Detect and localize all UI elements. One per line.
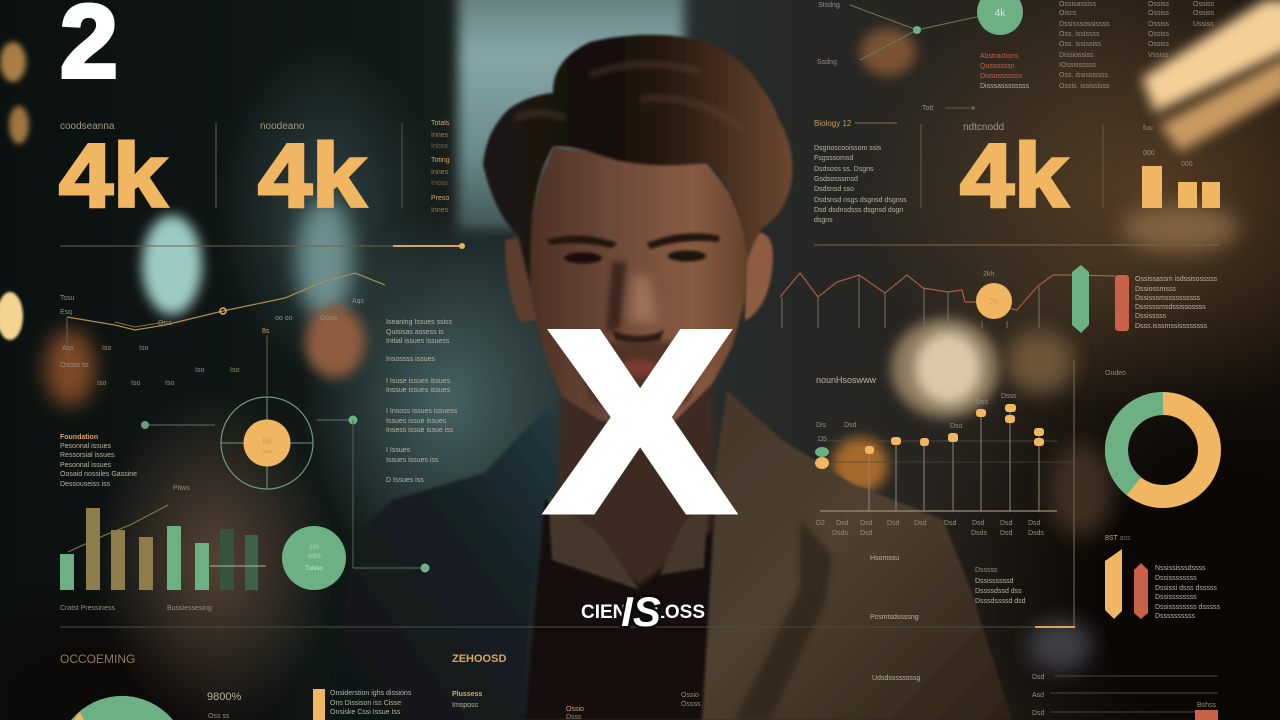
notes: Dsgnoscooissom ssis (814, 145, 882, 152)
chart labels: Ososs ss (60, 362, 89, 369)
mini bar chart: right (1142, 125, 1220, 208)
green circle callout: 280 (309, 545, 320, 551)
chart labels: Aqs (352, 298, 365, 305)
divider: right (814, 244, 1219, 246)
text block: foundation: Ressorsial issues (60, 452, 115, 459)
axis labels: Dsd (1000, 530, 1013, 537)
axis labels: D5 (818, 436, 827, 443)
text block: top right red list: Dissosssssss (980, 73, 1023, 80)
text block: centre-left notes: Issues issue issues (386, 418, 447, 425)
brand logo: LOSS (653, 602, 705, 623)
green circle callout: Tuisso (305, 566, 323, 572)
text block: centre-left notes: I Insoss issues issuess (386, 408, 458, 415)
notes: Gsdsosssmsd (814, 176, 858, 183)
hair highlights (515, 64, 745, 130)
lollipop chart (815, 375, 1074, 537)
line chart: right red trend (780, 271, 1115, 328)
notes: Dsd dsdnsdsss dsgnsd dsgn (814, 207, 903, 214)
nose (606, 262, 626, 332)
shirt (525, 500, 715, 720)
axis labels: Dsds (832, 530, 848, 537)
text block: foundation (60, 434, 137, 488)
notes: Dssissssssss (1155, 594, 1197, 601)
mouth (618, 360, 662, 376)
axis labels: D2 (816, 520, 825, 527)
text block: foundation: Pesonnal issues (60, 462, 111, 469)
text columns: top right: Ossiss (1193, 1, 1214, 8)
stat label: coodseanna (60, 121, 115, 132)
face (530, 147, 747, 426)
axis labels: Dsd (860, 520, 873, 527)
divider with end dot (60, 243, 465, 249)
brand logo (581, 588, 705, 635)
axis labels: Dsd (914, 520, 927, 527)
jacket labels: Pcsmtsdssssng (870, 614, 919, 621)
hair (483, 35, 792, 285)
eyes (564, 252, 602, 264)
connector lines with dots (141, 416, 430, 572)
big number: 4k (59, 125, 168, 226)
text columns: top right: IOssissssss (1059, 62, 1096, 69)
text block: right capsule notes: Dssisssmssssssssss (1135, 295, 1200, 302)
indicator group: lower right (1105, 535, 1220, 620)
notes: Dssssssssss (1155, 613, 1196, 620)
side labels (431, 120, 450, 214)
text columns: top right: Ossiss (1148, 41, 1170, 48)
axis labels: Dsd (1000, 520, 1013, 527)
text block: top right red list: Abstractions (980, 53, 1019, 60)
notes: Dssissi dsss dsssss (1155, 585, 1217, 592)
notes: Dsdsnsd nsgs dsgnsd dsgnss (814, 197, 907, 204)
chart labels: Ass (62, 345, 74, 352)
text block: foundation: Pesonnal issues (60, 443, 111, 450)
bar chart axis labels: Cratst Pressiness (60, 605, 115, 612)
text columns: top right: Ossisassiss (1059, 1, 1096, 8)
bar chart axis labels: Bussiessesing (167, 605, 212, 612)
indicator: green capsule (1072, 265, 1089, 333)
notes: Dssissssssss (1155, 575, 1197, 582)
axis labels: Dsd (836, 520, 849, 527)
heading and notes: lower-centre: Ossss (681, 701, 701, 708)
line chart: right red trend: 2kh (983, 271, 994, 278)
side labels: Inoss (431, 143, 448, 150)
photo: man in jacket (327, 35, 1012, 720)
panel: right stat (814, 105, 1103, 226)
chart labels: oo oo (275, 315, 293, 322)
chart labels: Iso (131, 380, 140, 387)
axis labels: Dsd (972, 520, 985, 527)
text columns: top right: Ussiss (1193, 21, 1214, 28)
text block: centre-left notes: Insossss issues (386, 356, 436, 363)
heading and notes: lower-centre: Plussess (452, 691, 482, 698)
mini bar chart: right: fuu (1143, 125, 1153, 132)
yellow bar with notes: Onsiderstion ighs dissions (330, 690, 412, 697)
text columns: top right: Oss. issississss (1059, 72, 1108, 79)
red capsule (1134, 563, 1148, 619)
neck (555, 383, 713, 585)
network diagram: top right: Stsdng (818, 2, 840, 9)
notes: Dsdsnsd sso (814, 186, 854, 193)
big number: 4k (258, 125, 367, 226)
text block: right capsule notes: Dssisssss (1135, 313, 1167, 320)
figures: lower-left: 9800% (207, 691, 241, 703)
panel: top-left stat one (59, 121, 168, 226)
text columns: top right: Ossiss (1193, 10, 1214, 17)
mini bar chart: right: 000 (1181, 161, 1193, 168)
jacket labels (870, 555, 920, 682)
indicator: red capsule (1115, 275, 1129, 331)
side labels: Toting (431, 157, 450, 164)
notes: Dsdsoss ss. Dsgns (814, 166, 874, 173)
text block: lower lollipop notes (975, 567, 1026, 605)
heading and notes: lower-centre (452, 653, 701, 720)
chart labels: Iso (230, 367, 239, 374)
network diagram: top right: 4k (995, 8, 1006, 19)
shirt collar (548, 495, 708, 590)
notes (814, 145, 907, 224)
text block: centre-left notes: Insess issue issue iss (386, 427, 454, 434)
text block: centre-left notes: I Issues (386, 447, 411, 454)
text columns: top right: Ossiss (1148, 10, 1170, 17)
axis labels: Dsd (860, 530, 873, 537)
text block: foundation: Dessouseiss iss (60, 481, 111, 488)
text block: top right red list: Disssassssssss (980, 83, 1030, 90)
lower-right table (1032, 674, 1218, 720)
chart labels: Iso (165, 380, 174, 387)
donut chart: Oudeo (1105, 370, 1126, 377)
text block: lower lollipop notes: Dsssdssssd dsd (975, 598, 1026, 605)
text block: centre-left notes: Issues issues iss (386, 457, 439, 464)
text block: centre-left notes: Initial issues issuess (386, 338, 450, 345)
figures: lower-left: Oss ss (208, 713, 230, 720)
gauge: ring with yellow centre: Isso (262, 449, 272, 455)
notes: Dssissssssss dsssss (1155, 604, 1220, 611)
frame line: right panel (1035, 360, 1075, 627)
text columns: top right: Ossiss (1148, 31, 1170, 38)
line chart: left trend (60, 273, 385, 395)
jacket labels: Udsdssssssssg (872, 675, 920, 682)
axis labels: Dsd (1028, 520, 1041, 527)
axis labels: Dsds (1028, 530, 1044, 537)
axis labels: Dsd (944, 520, 957, 527)
text block: right capsule notes: Dssisssmsdssissossss (1135, 304, 1206, 311)
heading and notes: lower-centre: Ossio (566, 706, 584, 713)
axis labels: Dis (816, 422, 827, 429)
text block: foundation: Oosaid nossiles Gassine (60, 471, 137, 478)
bar chart axis labels (60, 605, 212, 612)
notes (1155, 565, 1220, 620)
text columns: top right: Oiscs (1059, 10, 1077, 17)
mini bar chart: right: 000 (1143, 150, 1155, 157)
chart labels: Iso (97, 380, 106, 387)
heading and notes: lower-centre: ZEHOOSD (452, 653, 506, 665)
jacket lapel shadow (735, 520, 832, 720)
text block: centre-left notes: Quisisas assess is (386, 329, 444, 336)
chart labels: Iso (139, 345, 148, 352)
text block: top right red list: Qussosssn (980, 63, 1015, 70)
text block: centre-left notes: Iseaning Issues ssiss (386, 319, 453, 326)
lower-right table: Dsd (1032, 674, 1045, 681)
lower-right table: Bshss (1197, 702, 1217, 709)
side labels: Inoss (431, 180, 448, 187)
donut chart (1105, 370, 1210, 496)
notes: dsgns (814, 217, 833, 224)
indicator group: lower right: 8ST ass (1105, 535, 1131, 542)
panel: right stat: ndtcnodd (963, 122, 1004, 133)
notes: Fsgsssomsd (814, 155, 853, 162)
text block: centre-left notes: I Isuse issues issues (386, 378, 451, 385)
stubble (575, 340, 705, 415)
green circle callout (282, 526, 346, 590)
side labels: Preso (431, 195, 449, 202)
text block: lower lollipop notes: Dssissssssd (975, 578, 1014, 585)
big number: 4k (960, 125, 1069, 226)
big X mark: X (547, 277, 734, 565)
text columns: top right: Oss. issississ (1059, 41, 1102, 48)
axis labels: Dss (976, 399, 989, 406)
jacket labels: Hsomssu (870, 555, 899, 562)
network diagram: top right: Ssdng (817, 59, 837, 66)
notes: Nssississsdssss (1155, 565, 1206, 572)
text block: centre-left notes: D Issues iss (386, 477, 424, 484)
gauge: ring with yellow centre (221, 397, 313, 489)
chart labels (60, 295, 365, 387)
text block: right capsule notes: Ossissassm isdssisosssss (1135, 276, 1218, 283)
text columns: top right (1059, 1, 1214, 90)
yellow marker (976, 283, 1012, 319)
green circle callout: 4889 (307, 554, 321, 560)
axis labels: Dso (950, 423, 963, 430)
text columns: top right: Oss. ississss (1059, 31, 1100, 38)
yellow capsule (1105, 549, 1122, 619)
bar chart: green and tan (60, 485, 266, 612)
axis labels: Dsd (887, 520, 900, 527)
axis labels: Dsds (971, 530, 987, 537)
yellow bar with notes (313, 689, 412, 720)
axis labels (816, 393, 1044, 537)
jacket left (327, 407, 562, 720)
text block: foundation: Foundation (60, 434, 98, 441)
text columns: top right: Ossiss (1148, 21, 1170, 28)
side labels: Innes (431, 132, 449, 139)
bar chart: green and tan: Pitws (173, 485, 190, 492)
chart labels: Esq (60, 309, 72, 316)
side labels: Innes (431, 169, 449, 176)
lower-right table: Dsd (1032, 710, 1045, 717)
chart labels: Iso (195, 367, 204, 374)
lollipop chart: nounHsoswww (816, 375, 877, 385)
jacket right (695, 390, 1012, 720)
chart labels: 8s (262, 328, 270, 335)
text columns: top right: Vssiss (1148, 52, 1169, 59)
text columns: top right: Dissiossiss (1059, 52, 1094, 59)
chart labels: Tssu (60, 295, 74, 302)
text columns: top right: Ossiss (1148, 1, 1170, 8)
chart labels: Qiss (158, 320, 172, 327)
network diagram: top right (817, 0, 1023, 66)
side labels: Innes (431, 207, 449, 214)
stat label: noodeano (260, 121, 305, 132)
text columns: top right: Dssisssossissss (1059, 21, 1110, 28)
text block: right capsule notes (1135, 276, 1218, 330)
text block: centre-left notes: Inssue issues issues (386, 387, 451, 394)
text block: lower lollipop notes: Dsssss (975, 567, 998, 574)
line chart: right red trend: 2k (990, 297, 999, 306)
text block: right capsule notes: Dsss.isssmssissssssss (1135, 323, 1207, 330)
heading and notes: lower-centre: Ossio (681, 692, 699, 699)
biology heading: Biology 12 (814, 119, 852, 128)
panel: right stat: Tott (922, 105, 933, 112)
heading: lower-left: OCCOEMING (60, 652, 135, 666)
gauge: ring with yellow centre: 88 (263, 437, 272, 446)
text block: centre-left notes (386, 319, 458, 484)
pie chart: lower-left (71, 696, 173, 720)
eyebrows (547, 233, 720, 249)
text block: top right red list (980, 53, 1030, 90)
brand logo: CIEN (581, 602, 626, 623)
chart labels: Iso (102, 345, 111, 352)
ears (505, 236, 538, 322)
chart labels: Oooo (320, 315, 337, 322)
heading and notes: lower-centre: Imsposs (452, 702, 479, 709)
yellow bar with notes: Onsiske Cssi Issue Iss (330, 709, 401, 716)
text block: lower lollipop notes: Dssssdssd dss (975, 588, 1022, 595)
axis labels: Dsd (844, 422, 857, 429)
axis labels: Dsss (1001, 393, 1017, 400)
text columns: top right: Ossis. issississs (1059, 83, 1110, 90)
figures: lower-left (207, 691, 241, 720)
side labels: Totals (431, 120, 450, 127)
yellow bar with notes: Ons Dissison iss Cisse (330, 700, 401, 707)
lower-right table: Asd (1032, 692, 1044, 699)
panel: top-left stat two (216, 121, 402, 226)
text block: right capsule notes: Dssiossmsss (1135, 286, 1176, 293)
divider: lower (60, 626, 1075, 628)
brand logo: IS (621, 588, 661, 635)
